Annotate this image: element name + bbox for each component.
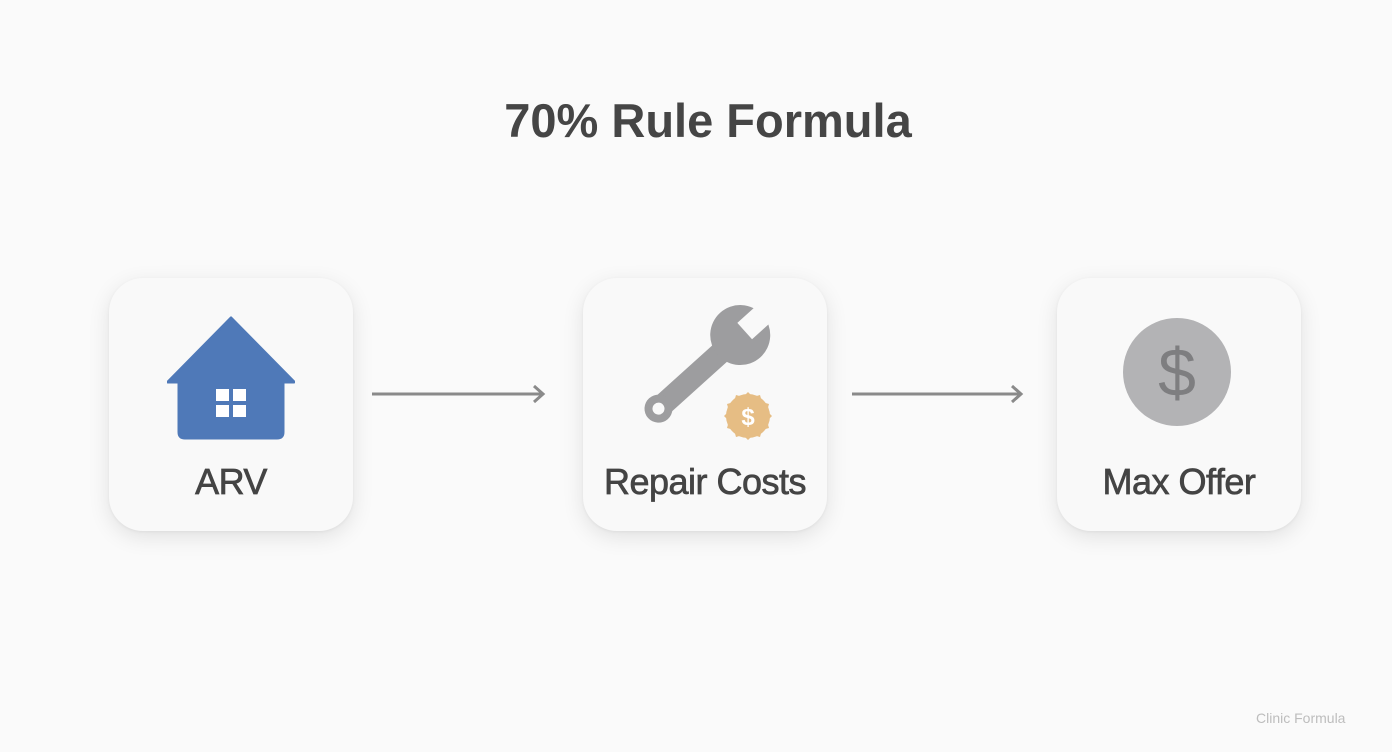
label: Repair Costs (604, 461, 806, 502)
icon: wrench with coin (644, 305, 772, 440)
icon: dollar coin: $ (1158, 335, 1196, 411)
label: ARV (195, 461, 267, 502)
title: 70% Rule Formula (504, 94, 912, 147)
panel: ARV (109, 278, 353, 531)
arrow 2 (852, 385, 1024, 403)
icon: house (167, 316, 295, 440)
arrow 1 (372, 385, 546, 403)
label: Max Offer (1103, 461, 1255, 502)
icon: wrench with coin: $ (741, 404, 755, 431)
panel: Repair Costs (583, 278, 827, 531)
icon: dollar coin (1123, 318, 1231, 426)
panel: Max Offer (1057, 278, 1301, 531)
footer watermark: Clinic Formula (1256, 710, 1345, 726)
